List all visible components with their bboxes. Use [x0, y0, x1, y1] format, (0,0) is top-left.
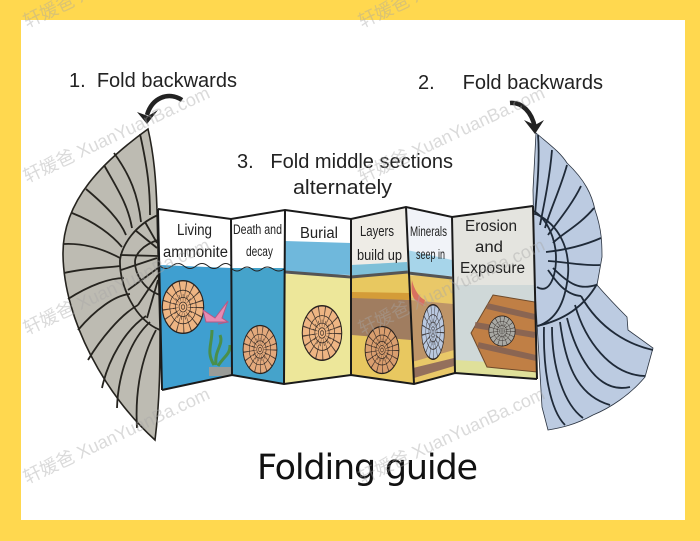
panel: Layers build up: build up	[357, 247, 402, 264]
panel: Death and decay	[231, 210, 285, 384]
heading: step 3: alternately	[293, 177, 392, 199]
watermarks: 轩媛爸 XuanYuanBa.com	[20, 384, 213, 488]
title: Folding guide: Folding guide	[257, 448, 478, 488]
panel: Death and decay: Death and	[233, 222, 282, 237]
panel: Erosion and Exposure: Exposure	[460, 260, 525, 277]
watermarks: 轩媛爸 XuanYuanBa.com	[355, 83, 548, 187]
right shell half	[533, 133, 653, 430]
watermarks: 轩媛爸 XuanYuanBa.com	[20, 235, 213, 339]
panel: Living ammonite	[158, 209, 232, 390]
heading: step 3	[237, 151, 453, 199]
icon: mineral arrow	[411, 280, 425, 306]
arrow: left fold	[137, 96, 182, 124]
heading: step 3: 3. Fold middle sections	[237, 151, 453, 173]
watermarks: 轩媛爸 XuanYuanBa.com	[20, 83, 213, 187]
panel: Living ammonite: ammonite	[163, 244, 228, 261]
heading: step 2: 2. Fold backwards	[418, 72, 603, 94]
watermarks: 轩媛爸 XuanYuanBa.com	[355, 235, 548, 339]
left shell half	[63, 129, 160, 440]
panel: Erosion and Exposure: and	[475, 239, 503, 256]
rock with fossil	[471, 295, 537, 372]
icon: seaweed and rock	[209, 330, 231, 376]
fold-out strip	[158, 206, 537, 390]
arrow: right fold	[510, 103, 544, 134]
heading: step 1: 1. Fold backwards	[69, 70, 237, 92]
watermarks: 轩媛爸 XuanYuanBa.com	[355, 384, 548, 488]
panel: Erosion and Exposure	[452, 206, 537, 379]
panel: Layers build up	[351, 207, 414, 384]
panel: Minerals seep in: seep in	[416, 246, 445, 262]
fold lines	[158, 206, 537, 390]
panel: Burial	[284, 210, 351, 384]
panel: Erosion and Exposure: Erosion	[465, 218, 517, 235]
panel: Minerals seep in	[406, 207, 455, 384]
panel: Death and decay: decay	[246, 244, 273, 259]
panel: Minerals seep in: Minerals	[410, 223, 447, 239]
panel: Living ammonite: Living	[177, 222, 212, 239]
watermarks	[20, 0, 548, 488]
panel: Burial: Burial	[300, 225, 338, 242]
panel: Layers build up: Layers	[360, 223, 394, 240]
icon: pink creature	[203, 301, 228, 324]
